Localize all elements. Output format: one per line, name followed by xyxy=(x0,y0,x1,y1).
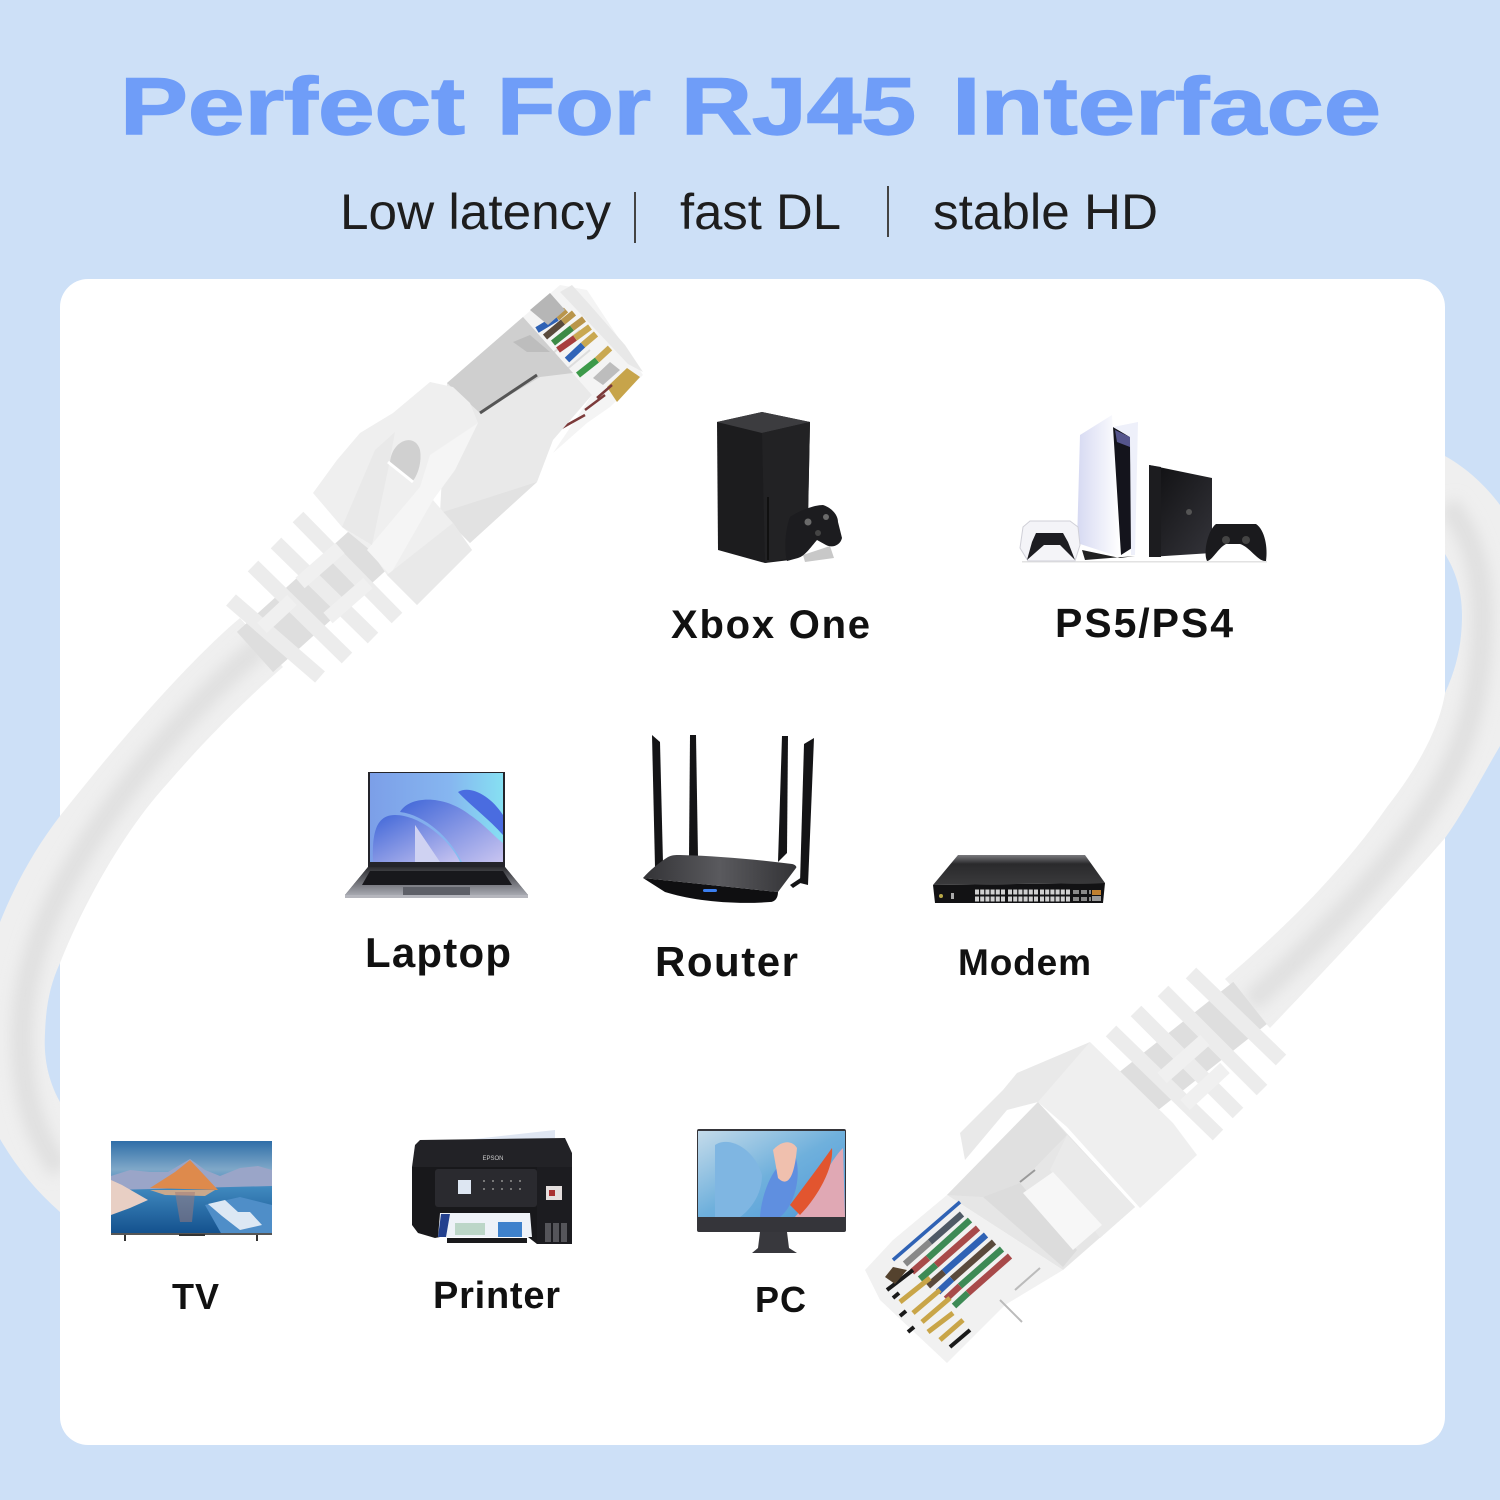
title: Perfect xyxy=(120,62,465,152)
subtitle: feature list: stable HD xyxy=(933,184,1158,240)
icon: laptop xyxy=(345,772,528,898)
connector: bottom right RJ45 plug xyxy=(865,973,1281,1363)
title xyxy=(120,62,1381,152)
icon: PS5 and PS4 consoles with controllers xyxy=(1020,415,1267,562)
label: PS5/PS4: PS5/PS4 xyxy=(1055,600,1233,646)
icon: printer xyxy=(412,1130,572,1244)
label: Printer: Printer xyxy=(433,1275,560,1317)
icon: PC all-in-one xyxy=(697,1129,846,1253)
label: TV: TV xyxy=(172,1276,219,1317)
icon: printer: EPSON xyxy=(482,1156,504,1162)
icon: TV xyxy=(111,1141,272,1241)
label: Xbox One: Xbox One xyxy=(671,603,870,647)
title: For xyxy=(497,62,651,152)
cable: right xyxy=(1220,450,1500,1040)
label: PC: PC xyxy=(755,1279,806,1320)
connector: top left RJ45 plug xyxy=(231,285,643,677)
title: RJ45 xyxy=(681,62,916,152)
title: Interface xyxy=(952,62,1381,152)
label: Router: Router xyxy=(655,938,798,985)
subtitle: feature list xyxy=(340,184,1158,243)
icon: router xyxy=(643,735,814,903)
icon: Xbox console with controller xyxy=(717,412,842,563)
icon: network switch modem xyxy=(933,855,1105,903)
panel: white card xyxy=(60,279,1445,1445)
cable: left xyxy=(0,600,295,1220)
label: Modem: Modem xyxy=(958,942,1091,983)
label: Laptop: Laptop xyxy=(365,929,511,976)
subtitle: feature list: Low latency xyxy=(340,184,611,240)
subtitle: feature list: fast DL xyxy=(680,184,841,240)
